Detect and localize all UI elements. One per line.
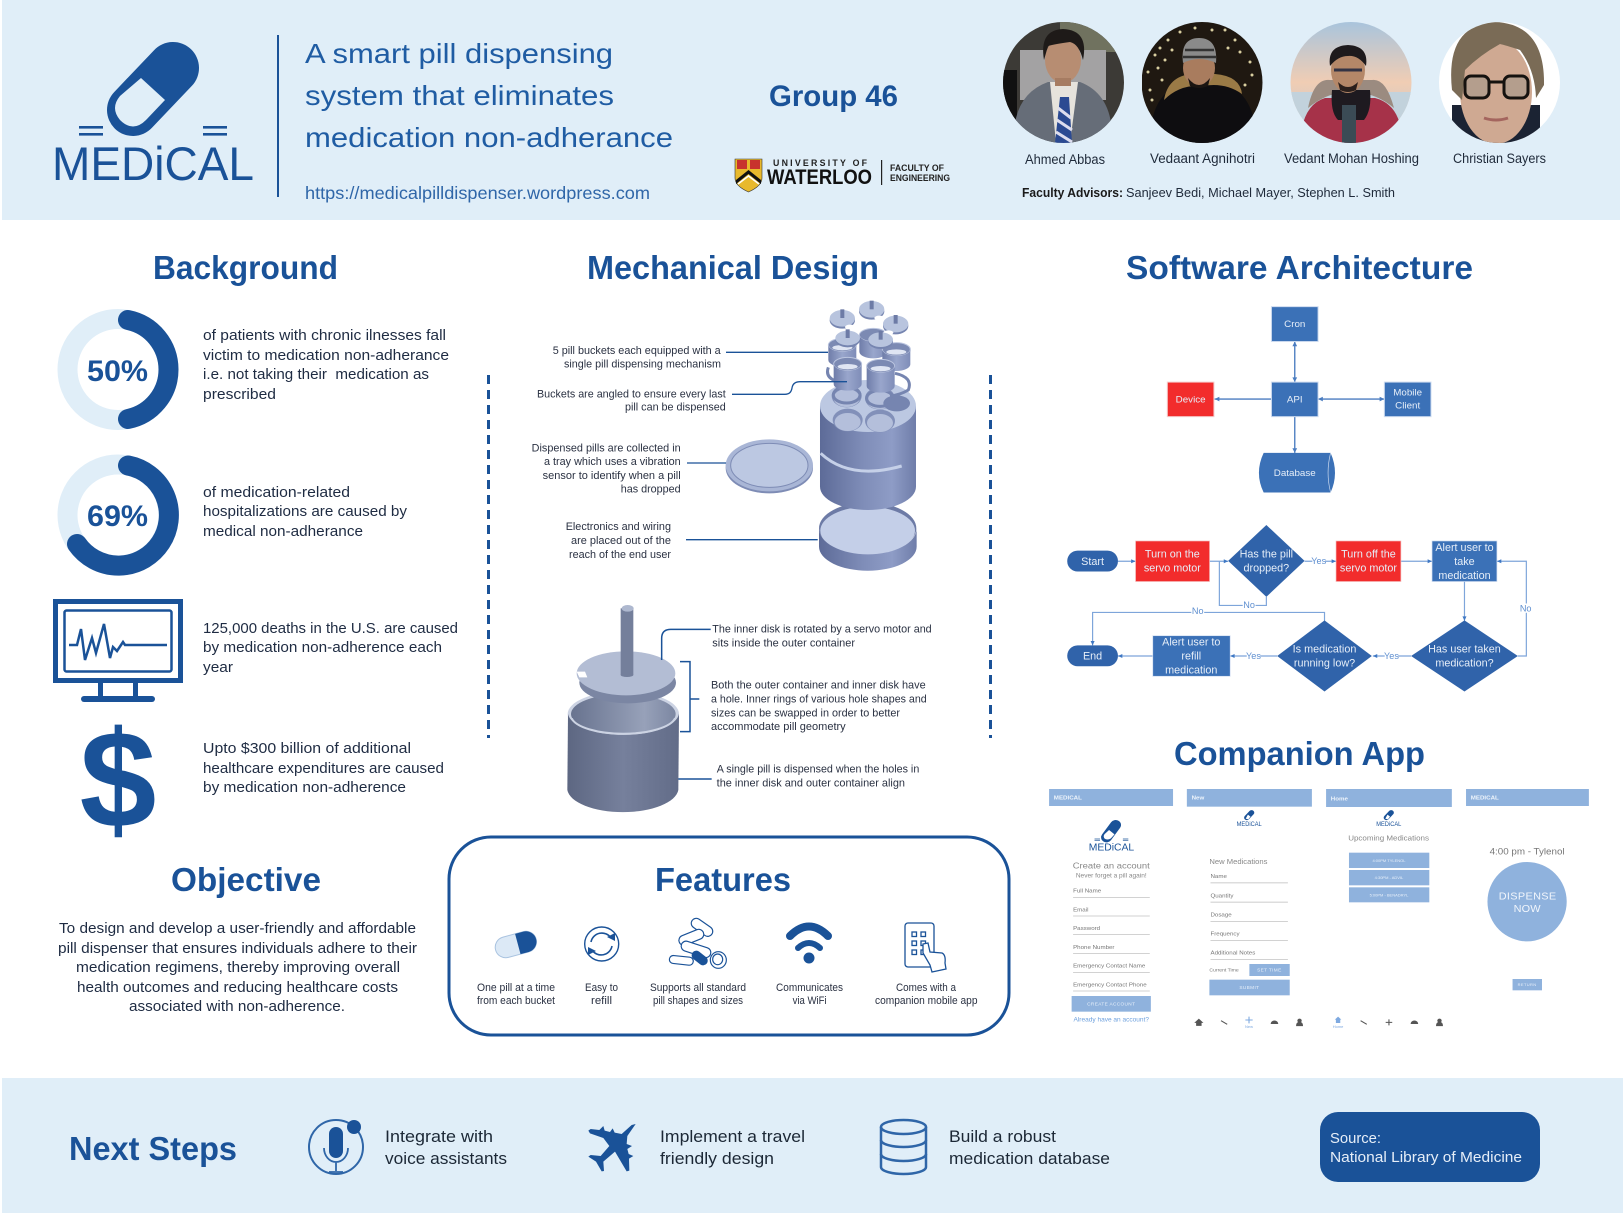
screen: home: Upcoming Medications	[1348, 834, 1429, 843]
caption: inner disk	[712, 624, 932, 650]
stat text: deaths: 125,000 deaths in the U.S. are caused	[203, 620, 458, 637]
stat text: deaths: year	[203, 659, 233, 676]
medication flowchart: Alert user to	[1162, 637, 1220, 649]
architecture diagram: Database	[1274, 468, 1316, 479]
feature: wifi	[776, 926, 844, 1007]
portrait: Christian Sayers	[1439, 22, 1560, 144]
objective text	[58, 920, 417, 1015]
screen: dispense now: MEDICAL	[1471, 796, 1499, 802]
feature: mobile app: Comes with a	[896, 982, 956, 994]
next step: voice assistants: voice assistants	[385, 1149, 507, 1168]
medication flowchart: medication	[1165, 665, 1217, 677]
architecture diagram: Device	[1176, 394, 1206, 405]
icon: database	[881, 1120, 926, 1174]
team member names: Ahmed Abbas	[1025, 152, 1105, 167]
caption: pill dispensed: A single pill is dispensed when the holes in	[717, 764, 919, 776]
medication flowchart: Has the pill	[1240, 549, 1293, 561]
heading: Next Steps: Next Steps	[69, 1130, 237, 1167]
source callout: Source:	[1330, 1130, 1381, 1147]
inner disk	[577, 651, 676, 703]
stat text: 50%: i.e. not taking their medication as	[203, 366, 429, 383]
medication flowchart: servo motor	[1340, 563, 1397, 575]
header band	[2, 0, 1620, 220]
icon: voice assistant microphone	[309, 1120, 363, 1174]
medication flowchart: Is medication	[1293, 644, 1356, 656]
medication flowchart: dropped?	[1244, 563, 1289, 575]
feature: one pill: One pill at a time	[477, 982, 555, 994]
medication flowchart: Alert user to	[1435, 542, 1494, 554]
faculty advisors: Faculty Advisors:	[1022, 185, 1123, 200]
caption: collection tray: Dispensed pills are collected in	[532, 443, 681, 455]
caption: pill dispensed	[717, 764, 919, 790]
caption: collection tray: has dropped	[621, 484, 681, 496]
screen: create account: Already have an account?	[1073, 1017, 1150, 1024]
heading: Companion App: Companion App	[1174, 735, 1425, 772]
team member names: Vedant Mohan Hoshing	[1284, 151, 1419, 166]
stat text: 69%: of medication-related	[203, 484, 350, 501]
university logo: ENGINEERING	[890, 173, 950, 183]
caption: pill buckets: single pill dispensing mechanism	[564, 359, 721, 371]
university logo: WATERLOO	[767, 166, 872, 189]
screen: home: 4:00PM TYLENOL	[1372, 859, 1405, 863]
stat text: cost: Upto $300 billion of additional	[203, 740, 411, 757]
heading: Objective: Objective	[171, 861, 321, 898]
icon: airplane	[588, 1124, 636, 1171]
stat text: 69%: hospitalizations are caused by	[203, 503, 407, 520]
screen: create account: CREATE ACCOUNT	[1087, 1002, 1135, 1007]
donut: 69%: 69%	[87, 500, 148, 533]
group number: Group 46	[769, 80, 898, 113]
objective text: pill dispenser that ensures individuals adhere to their	[58, 940, 417, 957]
medication flowchart: Turn on the	[1145, 549, 1200, 561]
screen: home: 4:30PM - ADVIL	[1375, 876, 1403, 880]
section dividers	[488, 375, 990, 738]
screen: new medications: New	[1245, 1025, 1253, 1029]
objective text: health outcomes and reducing healthcare costs	[77, 979, 398, 996]
team member names: Vedaant Agnihotri	[1150, 151, 1255, 166]
screen: new medications: New Medications	[1209, 857, 1268, 866]
screen: create account: Phone Number	[1073, 945, 1115, 951]
medication flowchart: running low?	[1294, 658, 1355, 670]
callout lines: mechanism	[662, 629, 712, 779]
screen: home: Home	[1333, 1025, 1343, 1029]
university logo: UNIVERSITY OF	[773, 158, 868, 168]
medication flowchart: take	[1454, 556, 1475, 568]
caption: inner disk: sits inside the outer container	[712, 638, 855, 650]
screen: create account: Full Name	[1073, 889, 1102, 894]
medication flowchart: End	[1083, 651, 1102, 663]
team member names: Christian Sayers	[1453, 151, 1546, 166]
screen: new medications: MEDiCAL	[1237, 821, 1262, 828]
caption: pill buckets: 5 pill buckets each equipped with a	[553, 345, 721, 357]
feature: pill shapes	[650, 916, 746, 1007]
medication flowchart: Yes	[1246, 651, 1261, 661]
exploded view of dispenser	[726, 301, 917, 571]
next step: travel design: friendly design	[660, 1149, 774, 1168]
feature: one pill	[477, 929, 555, 1007]
screen: create account: Never forget a pill again!	[1076, 873, 1147, 880]
stat text: deaths: by medication non-adherence each	[203, 639, 442, 656]
caption: collection tray	[532, 443, 681, 496]
caption: electronics: reach of the end user	[569, 549, 671, 561]
source callout: National Library of Medicine	[1330, 1149, 1522, 1166]
pill buckets	[828, 328, 910, 393]
companion app screens	[1049, 789, 1589, 1029]
next step: travel design: Implement a travel	[660, 1127, 805, 1146]
screen: new medications: SUBMIT	[1239, 985, 1259, 990]
caption: pill buckets	[553, 345, 721, 371]
architecture diagram: API	[1287, 394, 1303, 405]
caption: angled buckets: Buckets are angled to ensure every last	[537, 389, 726, 401]
feature: one pill: from each bucket	[477, 995, 555, 1007]
stat text: cost	[203, 740, 444, 796]
website url: https://medicalpilldispenser.wordpress.com	[305, 183, 650, 203]
feature: pill shapes: pill shapes and sizes	[653, 995, 744, 1007]
tagline: medication non-adherance	[305, 122, 673, 153]
feature: mobile app: companion mobile app	[875, 995, 978, 1007]
medication flowchart: Start	[1081, 556, 1104, 568]
screen: new medications: SET TIME	[1257, 968, 1282, 973]
feature: easy to refill: refill	[591, 995, 612, 1007]
caption: swappable rings: Both the outer container and inner disk have	[711, 680, 926, 692]
medication flowchart: medication?	[1435, 658, 1494, 670]
screen: home: MEDiCAL	[1376, 821, 1402, 828]
next step: medication database	[949, 1127, 1110, 1168]
feature: mobile app	[875, 923, 978, 1007]
caption: electronics: are placed out of the	[571, 535, 671, 547]
architecture diagram: Mobile	[1393, 388, 1422, 399]
next step: travel design	[660, 1127, 805, 1168]
caption: collection tray: sensor to identify when a pill	[543, 470, 681, 482]
collection tray	[726, 439, 813, 493]
stat text: 50%	[203, 327, 449, 403]
logo: MEDiCAL capsule	[52, 68, 254, 190]
stat text: cost: healthcare expenditures are caused	[203, 760, 444, 777]
dispensing mechanism model	[567, 605, 712, 812]
tagline: A smart pill dispensing	[305, 38, 613, 69]
footer band	[2, 1078, 1623, 1213]
faculty advisors: Sanjeev Bedi, Michael Mayer, Stephen L. Smith	[1126, 185, 1395, 200]
software diagrams	[1067, 307, 1533, 692]
portrait: Vedant Mohan Hoshing	[1290, 22, 1412, 143]
caption: swappable rings: sizes can be swapped in order to better	[711, 708, 900, 720]
caption: angled buckets	[537, 389, 726, 414]
screen: new medications: New	[1192, 796, 1205, 802]
screen: dispense now: 4:00 pm - Tylenol	[1490, 846, 1565, 857]
main body	[820, 380, 916, 510]
source callout	[1320, 1112, 1540, 1182]
screen: new medications: Quantity	[1210, 894, 1233, 899]
screen: new medications: Additional Notes	[1210, 951, 1255, 957]
medication flowchart: Yes	[1384, 651, 1399, 661]
next step: voice assistants: Integrate with	[385, 1127, 493, 1146]
screen: create account: Create an account	[1073, 861, 1150, 870]
architecture diagram: Cron	[1284, 319, 1305, 330]
tagline	[305, 38, 673, 153]
header divider	[277, 35, 279, 197]
caption: swappable rings: accommodate pill geometry	[711, 721, 846, 733]
medication flowchart: No	[1192, 606, 1204, 616]
objective text: To design and develop a user-friendly and affordable	[59, 920, 416, 937]
stat text: cost: by medication non-adherence	[203, 779, 406, 796]
medication flowchart: Yes	[1311, 556, 1327, 566]
medication flowchart: refill	[1181, 651, 1201, 663]
screen: dispense now	[1466, 789, 1589, 990]
screen: new medications: Name	[1210, 874, 1228, 880]
icon: dollar sign: $	[80, 703, 156, 857]
drive shaft	[621, 605, 634, 677]
caption: pill dispensed: the inner disk and outer container align	[717, 778, 905, 790]
screen: home: Home	[1331, 797, 1349, 802]
screen: create account: Password	[1073, 926, 1100, 932]
medication flowchart: No	[1243, 600, 1255, 610]
screen: new medications	[1187, 789, 1312, 1029]
medication flowchart: Has user taken	[1428, 644, 1501, 656]
medication flowchart	[1067, 525, 1533, 692]
feature: pill shapes: Supports all standard	[650, 982, 746, 994]
bucket lids	[830, 301, 908, 349]
heading: Features: Features	[655, 861, 791, 898]
medication flowchart: medication	[1438, 570, 1491, 582]
objective text: associated with non-adherence.	[129, 998, 345, 1015]
heading: Software Architecture: Software Architecture	[1126, 249, 1473, 286]
architecture diagram	[1167, 307, 1431, 492]
next step: voice assistants	[385, 1127, 507, 1168]
medication flowchart: No	[1520, 604, 1532, 613]
screen: create account: Email	[1073, 908, 1088, 913]
screen: home	[1326, 789, 1452, 1029]
screen: create account	[1049, 789, 1173, 1024]
screen: dispense now: NOW	[1514, 904, 1541, 915]
stat text: 50%: prescribed	[203, 386, 276, 403]
stat text: 69%	[203, 484, 407, 540]
donut: 69%	[68, 464, 169, 566]
screen: dispense now: RETURN	[1518, 983, 1536, 987]
logo: MEDiCAL capsule: MEDiCAL	[52, 137, 254, 190]
stat text: 50%: victim to medication non-adherance	[203, 347, 449, 364]
portrait: Ahmed Abbas	[1003, 22, 1124, 143]
caption: swappable rings	[711, 680, 927, 733]
donut: 50%	[68, 319, 168, 420]
tagline: system that eliminates	[305, 80, 614, 111]
stat text: deaths	[203, 620, 458, 676]
outer container	[567, 691, 679, 812]
screen: create account: MEDICAL	[1054, 796, 1082, 801]
caption: swappable rings: a hole. Inner rings of various hole shapes and	[711, 694, 927, 706]
screen: new medications: Frequency	[1210, 932, 1240, 937]
caption: collection tray: a tray which uses a vibration	[544, 456, 681, 468]
team member names	[1025, 151, 1546, 167]
next step: medication database: Build a robust	[949, 1127, 1056, 1146]
heading: Background: Background	[153, 249, 338, 286]
base tray	[819, 502, 917, 571]
stat text: 69%: medical non-adherance	[203, 523, 363, 540]
objective text: medication regimens, thereby improving overall	[76, 959, 400, 976]
portrait: Vedaant Agnihotri	[1142, 22, 1263, 143]
donut: 50%: 50%	[87, 355, 148, 388]
icon: heart monitor	[56, 602, 180, 702]
caption: inner disk: The inner disk is rotated by a servo motor and	[712, 624, 932, 636]
caption: electronics	[566, 521, 671, 561]
screen: dispense now: DISPENSE	[1499, 892, 1556, 902]
screen: new medications: Current Time	[1209, 968, 1239, 974]
caption: angled buckets: pill can be dispensed	[625, 402, 726, 414]
callout lines: exploded view	[686, 352, 847, 540]
feature: easy to refill	[585, 927, 619, 1007]
feature: wifi: Communicates	[776, 982, 844, 994]
next step: medication database: medication database	[949, 1149, 1110, 1168]
feature: easy to refill: Easy to	[585, 982, 618, 994]
screen: create account: MEDiCAL	[1089, 842, 1134, 854]
screen: create account: Emergency Contact Phone	[1073, 983, 1147, 989]
caption: electronics: Electronics and wiring	[566, 521, 671, 533]
screen: create account: Emergency Contact Name	[1073, 964, 1146, 970]
architecture diagram: Client	[1395, 400, 1421, 411]
university logo: FACULTY OF	[890, 163, 944, 173]
screen: new medications: Dosage	[1210, 913, 1232, 918]
heading: Mechanical Design: Mechanical Design	[587, 249, 879, 286]
stat text: 50%: of patients with chronic ilnesses fall	[203, 327, 446, 344]
panel: features	[449, 837, 1009, 1035]
university logo	[735, 158, 950, 192]
feature: wifi: via WiFi	[793, 995, 827, 1007]
tilted rings	[827, 367, 909, 406]
medication flowchart: servo motor	[1144, 563, 1201, 575]
screen: home: 5:00PM - BENADRYL	[1370, 893, 1408, 897]
medication flowchart: Turn off the	[1341, 549, 1396, 561]
